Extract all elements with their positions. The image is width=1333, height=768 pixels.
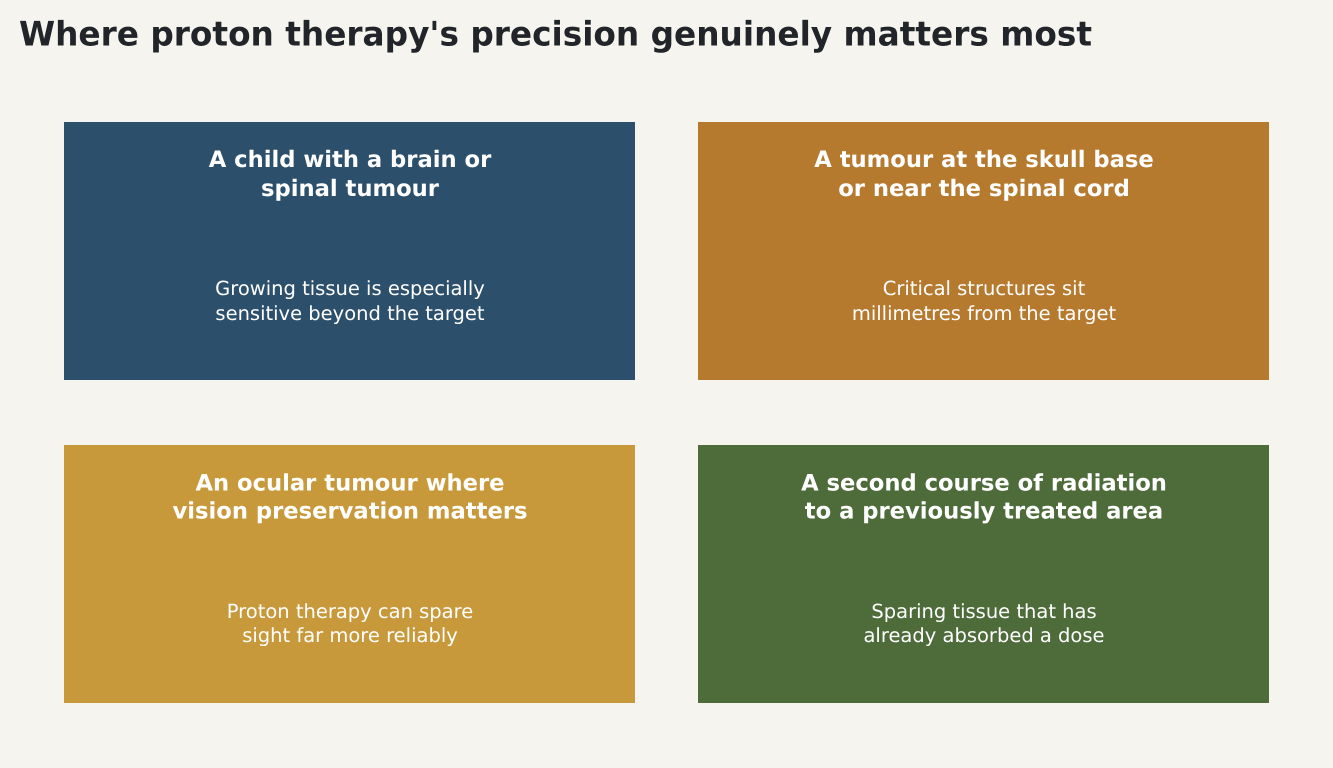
text: second course: Sparing tissue that has [871,600,1097,623]
heading: second course: to a previously treated area [805,498,1163,524]
panel: skull base tumour [698,122,1269,380]
text: ocular: Proton therapy can spare [227,600,473,623]
heading: child: spinal tumour [261,176,440,202]
heading: second course: A second course of radiation [801,470,1167,496]
heading: skull base: A tumour at the skull base [814,147,1154,173]
text: second course: already absorbed a dose [863,624,1105,647]
heading: skull base: or near the spinal cord [838,176,1130,202]
text: skull base: millimetres from the target [852,302,1117,325]
panel: second course of radiation [698,445,1269,703]
text: skull base: Critical structures sit [883,277,1086,300]
text: child: sensitive beyond the target [215,302,485,325]
heading: ocular: An ocular tumour where [195,470,505,496]
title: Where proton therapy's precision genuinely matters most [19,14,1092,54]
text: ocular: sight far more reliably [242,624,458,647]
panel: ocular tumour [64,445,635,703]
panel: child with brain or spinal tumour [64,122,635,380]
heading: child: A child with a brain or [209,147,492,173]
text: child: Growing tissue is especially [215,277,485,300]
heading: ocular: vision preservation matters [173,498,527,524]
